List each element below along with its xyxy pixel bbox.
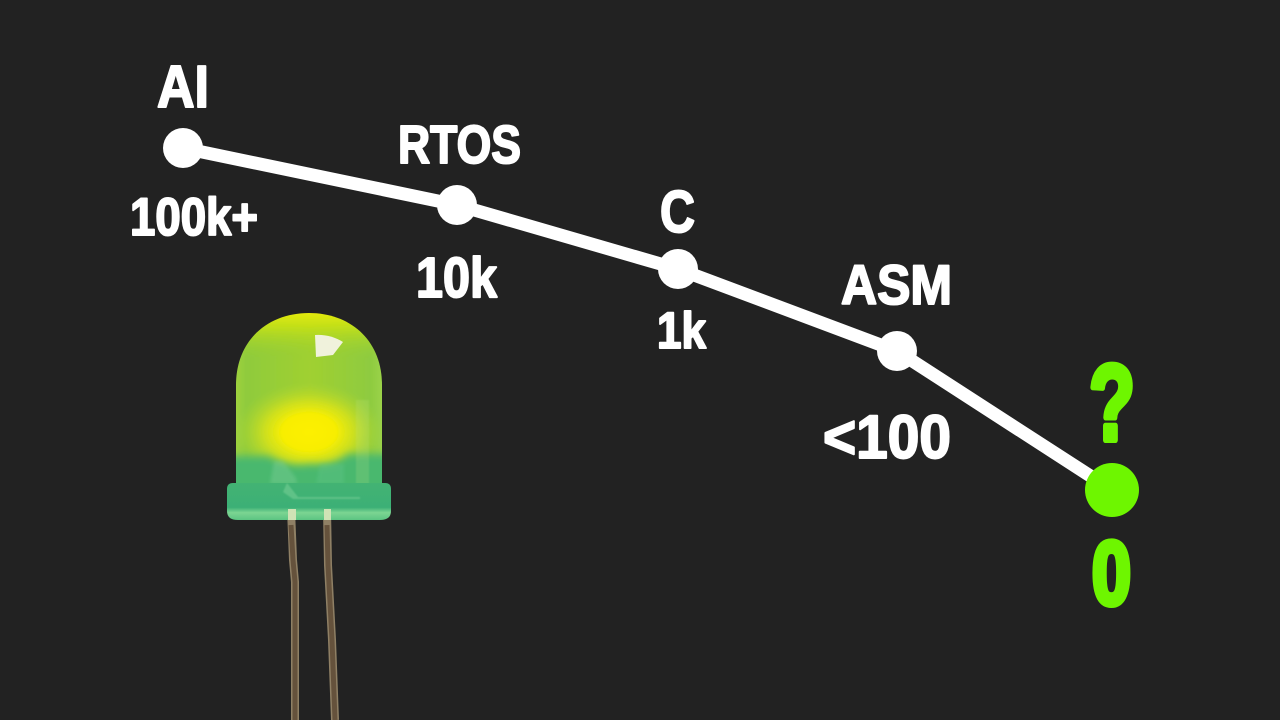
node: C: 1k bbox=[657, 302, 707, 359]
LED leg: right bbox=[327, 509, 335, 720]
LED leg tops bbox=[288, 509, 331, 520]
node: AI bbox=[130, 54, 258, 247]
node: ASM bbox=[823, 253, 952, 471]
node: zero target bbox=[1085, 342, 1139, 624]
trend line bbox=[183, 148, 1112, 490]
node: AI: AI bbox=[157, 54, 209, 120]
node: AI: 100k+ bbox=[130, 188, 258, 247]
node: C bbox=[657, 179, 707, 359]
node: RTOS: 10k bbox=[416, 246, 497, 310]
LED dome bbox=[236, 313, 382, 483]
node: RTOS: RTOS bbox=[398, 115, 521, 175]
node: zero target: ? bbox=[1089, 342, 1135, 463]
LED leg: left bbox=[291, 509, 295, 720]
node: C: C bbox=[660, 179, 695, 245]
node: zero target: 0 bbox=[1092, 524, 1131, 624]
LED internal reflections bbox=[283, 483, 360, 499]
LED flange bbox=[227, 483, 391, 520]
node: ASM: ASM bbox=[841, 253, 952, 316]
infographic canvas bbox=[132, 65, 1139, 720]
LED photo illustration bbox=[225, 310, 395, 720]
node: ASM: <100 bbox=[823, 403, 951, 471]
node: RTOS bbox=[398, 115, 521, 310]
LED highlight bbox=[315, 335, 343, 357]
